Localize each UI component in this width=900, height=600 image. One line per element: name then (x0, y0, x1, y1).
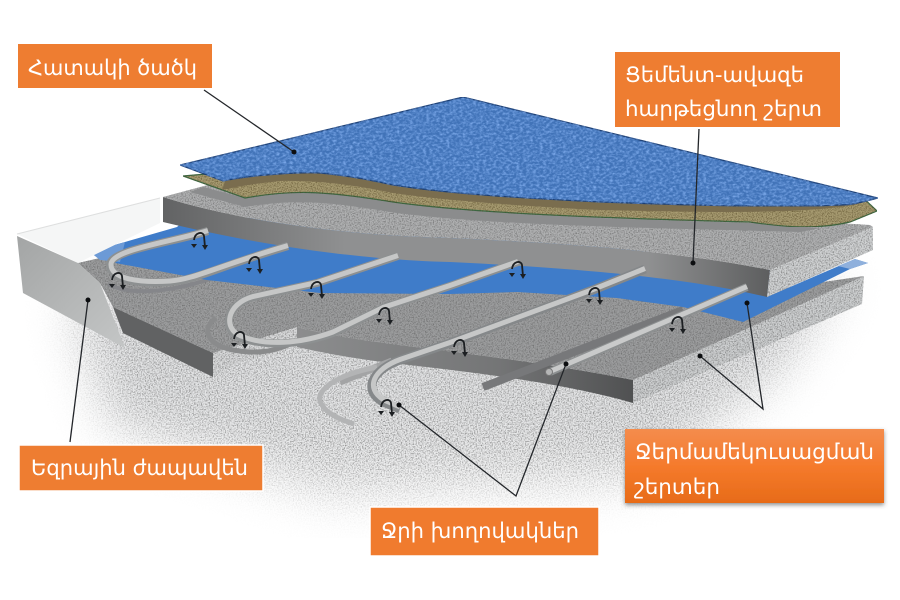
label: edge tape: Եզրային ժապավեն (31, 456, 248, 480)
pipes (110, 230, 747, 409)
panel: edge tape (17, 198, 160, 348)
insulation curved side face (297, 327, 633, 403)
leader lines (70, 90, 763, 496)
label: cement-sand screed: հարթեցնող շերտ (625, 97, 822, 121)
insulation top surface (78, 240, 864, 380)
leader: insulation (698, 300, 763, 409)
pipe 3 (372, 268, 645, 409)
panel: cement-sand screed layer (163, 183, 873, 297)
label: insulation layers: Ջերմամեկուսացման (635, 440, 874, 464)
leader: screed (690, 129, 699, 266)
screed shadow band (190, 187, 820, 232)
pipe 1 (110, 230, 288, 282)
screed side face (163, 197, 770, 297)
tape pale top (17, 198, 160, 263)
panel: blue reflective foil (90, 215, 868, 322)
leader: floor covering (204, 90, 296, 154)
label: insulation layers (625, 429, 884, 503)
label: floor covering (18, 44, 212, 88)
label: cement-sand screed (615, 52, 840, 127)
screed top surface (163, 183, 873, 270)
pipe 4 (546, 286, 747, 376)
pipe 2 (229, 256, 518, 343)
tape top edge (17, 198, 160, 234)
insulation right side face (633, 276, 864, 403)
pipe clips (109, 233, 686, 417)
panel: lower insulation layer (78, 240, 864, 403)
insulation floor notch (213, 327, 297, 377)
label: cement-sand screed: Ցեմենտ-ավազե (625, 63, 804, 87)
label: edge tape (19, 445, 263, 491)
tape front (17, 236, 125, 348)
label: water pipes (370, 507, 599, 556)
label: insulation layers: շերտեր (634, 475, 720, 499)
insulation left side face (113, 307, 213, 377)
screed right face (767, 227, 873, 297)
label: floor covering: Հատակի ծածկ (28, 56, 197, 80)
leader: water pipes (396, 362, 568, 496)
leader: edge tape (70, 298, 90, 442)
floor (48, 267, 851, 524)
label: water pipes: Ջրի խողովակներ (381, 519, 579, 543)
tan shadow band (222, 173, 860, 212)
panel: blue floor covering (180, 97, 878, 206)
panel: tan underlay (183, 170, 877, 227)
band shadows on insulation (108, 279, 683, 424)
